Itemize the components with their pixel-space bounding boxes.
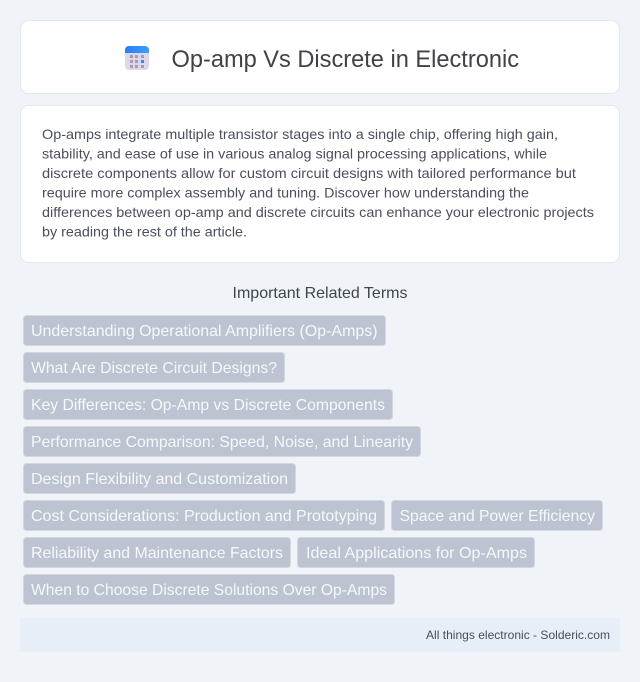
chip: reliability and maintenance (24, 538, 290, 568)
chip: understanding op-amps: Understanding Operational Amplifiers (Op-Amps) (31, 323, 378, 340)
text block: description paragraph: stability, and ease of use in various analog signal processing applications, while (42, 146, 547, 162)
footer credit: All things electronic - Solderic.com (426, 628, 610, 642)
panel: title card (20, 20, 620, 94)
chip: discrete circuit designs: What Are Discrete Circuit Designs? (31, 360, 277, 377)
chip: design flexibility (24, 464, 296, 494)
chip: understanding op-amps (24, 316, 386, 346)
text block: description paragraph: discrete components allow for custom circuit designs with tailored performance but (42, 165, 576, 181)
title: Op-amp Vs Discrete in Electronic (172, 46, 519, 73)
chip: key differences: Key Differences: Op-Amp vs Discrete Components (31, 397, 385, 414)
text block: description paragraph: differences between op-amp and discrete circuits can enhance your electronic projects (42, 204, 594, 220)
chip: key differences (24, 390, 392, 420)
heading: related terms: Important Related Terms (232, 285, 408, 302)
chip: space and power efficiency: Space and Power Efficiency (400, 508, 595, 525)
chip: ideal applications (298, 538, 534, 568)
chip: performance comparison (24, 426, 420, 456)
text block: description paragraph (42, 126, 594, 240)
footer bar (20, 618, 620, 652)
chip: cost considerations: Cost Considerations: Production and Prototyping (31, 508, 377, 525)
term chips (24, 316, 602, 604)
text block: description paragraph: Op-amps integrate multiple transistor stages into a single chip, offering high gain, (42, 126, 558, 142)
chip: when to choose discrete (24, 574, 394, 604)
chip: design flexibility: Design Flexibility and Customization (31, 471, 288, 488)
text block: description paragraph: by reading the rest of the article. (42, 224, 247, 240)
chip: ideal applications: Ideal Applications for Op-Amps (306, 545, 527, 562)
chip: reliability and maintenance: Reliability and Maintenance Factors (31, 545, 283, 562)
chip: cost considerations (24, 500, 384, 530)
chip: discrete circuit designs (24, 352, 284, 382)
icon: calendar grid (125, 46, 149, 70)
chip: space and power efficiency (392, 500, 602, 530)
panel: description (20, 106, 620, 262)
chip: when to choose discrete: When to Choose Discrete Solutions Over Op-Amps (31, 582, 387, 599)
chip: performance comparison: Performance Comparison: Speed, Noise, and Linearity (31, 434, 413, 451)
text block: description paragraph: require more complex assembly and tuning. Discover how understanding the (42, 184, 529, 200)
